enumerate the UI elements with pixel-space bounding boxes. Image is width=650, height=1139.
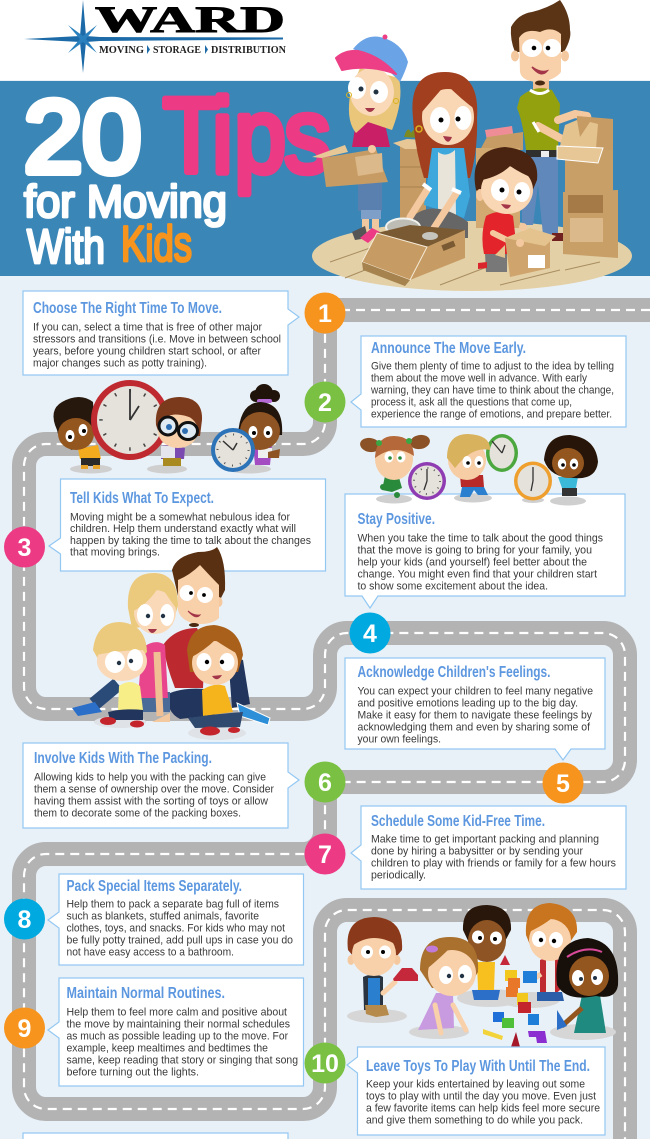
panel: tip 1: If you can, select a time that is free of other major [33, 322, 262, 334]
panel: tip 5: Acknowledge Children's Feelings. [358, 664, 550, 681]
boy with car [348, 917, 418, 1017]
boy with box [475, 147, 556, 277]
panel: tip 2: them about the move well in advance. With early [371, 372, 588, 384]
panel: tip 8 [48, 874, 304, 965]
title: Kids [121, 216, 192, 272]
panel: tip 7: done by hiring a babysitter or by sending your [371, 846, 583, 858]
panel: stay positive: Stay Positive. [358, 511, 435, 528]
logo: Ward Moving Storage Distribution: WARD [95, 0, 285, 41]
panel: tip 1 [23, 291, 299, 375]
panel: tip 5: acknowledging them and even by sharing some of [358, 722, 590, 734]
blonde girl [93, 622, 147, 728]
panel: tip 7: Schedule Some Kid-Free Time. [371, 813, 545, 830]
panel: tip 2: Announce The Move Early. [371, 340, 526, 357]
illustration: family sitting together [72, 547, 270, 740]
panel: tip 2 [351, 336, 626, 427]
badge 3: 3 [18, 534, 31, 562]
panel: tip 2: warning, they can have time to think about the change, [370, 384, 614, 396]
badge 10 [304, 1042, 346, 1084]
panel: tip 1: major changes such as potty training). [33, 358, 207, 370]
logo: Ward Moving Storage Distribution: MOVING [99, 45, 144, 56]
panel: tip 7: Make time to get important packing and planning [371, 834, 599, 846]
panel: stay positive: change. You might even find that your children start [358, 568, 597, 580]
panel: stay positive: help your kids (and yourself) feel better about the [358, 556, 587, 568]
badge 7: 7 [318, 841, 332, 869]
badge 7 [304, 834, 346, 874]
panel: tip 9: example, keep mealtimes and bedtimes the [66, 1042, 268, 1054]
title: 20 [24, 80, 141, 194]
header band [0, 81, 650, 276]
badge 8: 8 [18, 906, 32, 934]
badge 5: 5 [556, 770, 570, 798]
boxes behind mother [393, 126, 523, 228]
girl with blue clock [211, 384, 282, 472]
panel: tip 6 [23, 743, 299, 828]
boy with glasses [156, 397, 202, 466]
panel: tip 9: same, keep reading that story or singing that song [66, 1054, 298, 1066]
panel: tip 5 [345, 658, 605, 760]
stacked boxes [557, 116, 618, 258]
illustration: children with clocks left [53, 380, 282, 474]
panel: tip 1: stressors and transitions (i.e. Move in between school [33, 334, 281, 346]
title [24, 78, 331, 274]
panel: stay positive: When you take the time to talk about the good things [358, 532, 603, 544]
panel: tip 5: and positive emotions leading up to the big day. [358, 698, 578, 710]
panel: tip 3 [49, 479, 326, 571]
panel: tip 5: You can expect your children to feel many negative [358, 686, 593, 698]
panel: tip 10: and give them something to do while you pack. [366, 1114, 583, 1126]
badge 9 [4, 1008, 45, 1048]
panel: tip 8: clothes, toys, and snacks. For kids who may not [66, 922, 285, 934]
panel: tip 2: process it, ask all the questions that come up, [371, 396, 572, 408]
panel: next tip, cropped at page bottom [23, 1133, 288, 1139]
number badges [4, 292, 584, 1084]
title: With [27, 221, 105, 274]
illustration: children playing with toys [347, 903, 618, 1047]
panel: tip 6: Involve Kids With The Packing. [34, 750, 212, 767]
blond boy [447, 434, 518, 497]
badge 1 [304, 292, 346, 334]
panel: tip 3: that moving brings. [70, 546, 160, 558]
panel: tip 6: them to decorate some of the packing boxes. [34, 808, 241, 820]
logo: Ward Moving Storage Distribution: DISTRIBUTION [211, 45, 287, 56]
badge 10: 10 [311, 1050, 339, 1078]
panel: tip 3: Tell Kids What To Expect. [70, 490, 214, 507]
badge 8 [4, 898, 45, 940]
badge 5 [542, 762, 584, 804]
panel: tip 10 [347, 1047, 605, 1135]
panel: tip 6: Allowing kids to help you with the packing can give [34, 772, 266, 784]
boy with orange hair [526, 903, 577, 1001]
panel: stay positive [345, 494, 625, 608]
girl with pigtails [359, 433, 446, 500]
badge 4: 4 [363, 620, 377, 648]
panel: tip 3: happen by taking the time to talk about the changes [70, 535, 311, 547]
boy in yellow [463, 905, 511, 1000]
logo: Ward Moving Storage Distribution: STORAGE [153, 45, 201, 56]
girl with orange clock [514, 435, 598, 500]
panel: tip 6: them a sense of ownership over the move. Consider [34, 784, 274, 796]
panel: tip 10: Keep your kids entertained by leaving out some [366, 1078, 585, 1090]
panel: tip 7: children to play with friends or family for a few hours [371, 858, 616, 870]
panel: tip 1: Choose The Right Time To Move. [33, 300, 222, 317]
illustration: children with clocks right [359, 433, 598, 506]
panel: tip 10: toys to play with until the day you move. Even just [366, 1090, 596, 1102]
panel: tip 1: years, before young children start school, or after [33, 346, 261, 358]
father [163, 547, 270, 725]
girl with braids [556, 938, 618, 1033]
badge 6 [304, 762, 346, 802]
panel: tip 6: having them assist with the sorting of toys or allow [34, 796, 268, 808]
mother [362, 72, 477, 286]
panel: tip 7 [351, 806, 626, 889]
panel: tip 9: Help them to feel more calm and positive about [66, 1006, 287, 1018]
toy blocks [483, 970, 567, 1047]
badge 1: 1 [318, 300, 332, 328]
badge 4 [350, 612, 390, 654]
panel: tip 8: Help them to pack a separate bag full of items [66, 898, 279, 910]
panel: stay positive: that the move is going to bring for your family, you [358, 544, 592, 556]
badge 3 [4, 526, 45, 568]
badge 9: 9 [18, 1015, 31, 1043]
panel: tip 9: the move by maintaining their normal schedules [66, 1018, 290, 1030]
red clock [91, 380, 169, 460]
panel: tip 3: children. Help them understand exactly what will [70, 523, 296, 535]
panel: tip 5: your own feelings. [358, 734, 441, 746]
panel: tip 3: Moving might be a somewhat nebulous idea for [70, 512, 290, 524]
panel: tip 9: Maintain Normal Routines. [66, 985, 225, 1002]
panel: stay positive: to show some excitement about the idea. [358, 580, 548, 592]
mother [72, 573, 178, 722]
panel: tip 8: Pack Special Items Separately. [66, 878, 242, 895]
boy [187, 625, 243, 736]
title: Tips [163, 78, 331, 195]
panel: tip 9: before turning out the lights. [66, 1066, 199, 1078]
title: for Moving [24, 176, 227, 227]
panel: tip 7: periodically. [371, 870, 426, 882]
boy left [53, 397, 101, 469]
dad [511, 0, 589, 241]
badge 2: 2 [318, 389, 332, 417]
toy car [393, 968, 418, 981]
road [24, 310, 650, 1139]
panel: tip 2: Give them plenty of time to adjust to the idea by telling [371, 360, 614, 372]
panel: tip 2: experience the range of emotions, and prepare better. [371, 408, 612, 420]
panel: tip 8: not have easy access to a bathroom. [66, 946, 234, 958]
girl in lilac dress [418, 937, 478, 1033]
badge 2 [304, 382, 346, 422]
panel: tip 5: Make it easy for them to navigate these feelings by [358, 710, 593, 722]
panel: tip 8: be fully potty trained, add pull ups in case you do [66, 934, 293, 946]
panel: tip 10: a few favorite items can help kids feel more secure [366, 1102, 600, 1114]
badge 6: 6 [318, 769, 332, 797]
panel: tip 9: as much as possible leading up to the move. For [66, 1030, 288, 1042]
panel: tip 8: such as blankets, stuffed animals, favorite [66, 910, 259, 922]
panel: tip 9 [48, 978, 304, 1086]
logo: Ward Moving Storage Distribution [24, 0, 287, 73]
girl with cap [312, 34, 408, 243]
illustration: family packing boxes [312, 0, 632, 291]
